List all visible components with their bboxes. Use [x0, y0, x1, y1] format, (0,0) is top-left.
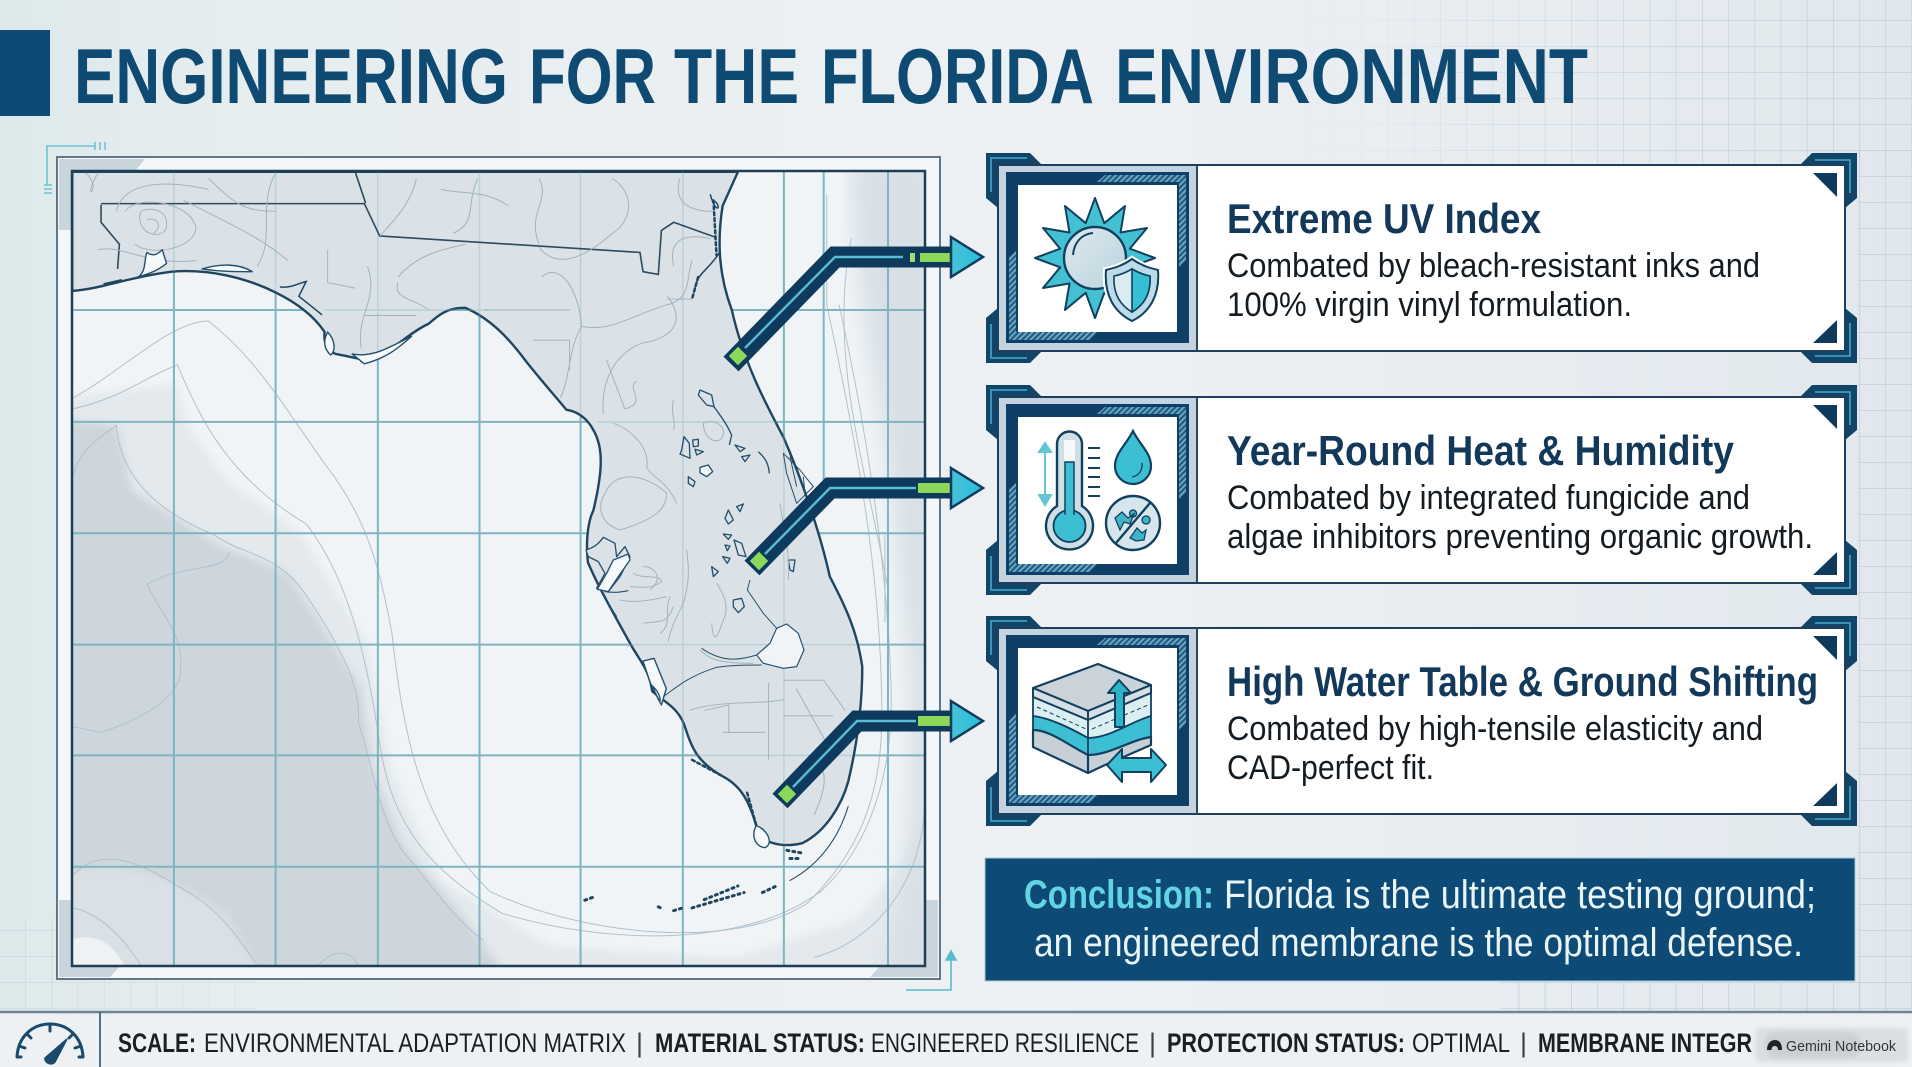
- footer status text: |: [1520, 1028, 1527, 1058]
- footer status text: |: [1149, 1028, 1156, 1058]
- title: FOR: [529, 32, 656, 120]
- card body text: [1227, 479, 1813, 556]
- panel: High Water Table and Ground Shifting: [986, 616, 1857, 826]
- panel: Year-Round Heat and Humidity: [986, 385, 1857, 595]
- title: [74, 32, 1588, 120]
- title: FLORIDA: [821, 32, 1094, 120]
- peninsula lakes, east: [643, 390, 813, 668]
- icon: ground layers with arrows: [1033, 664, 1166, 782]
- footer status text: ENGINEERED RESILIENCE: [871, 1028, 1139, 1058]
- inland contours and rivers: [86, 173, 845, 815]
- panel: Florida map: [44, 142, 956, 990]
- peninsula lakes, west: [586, 423, 762, 697]
- card body text: 100% virgin vinyl formulation.: [1227, 286, 1632, 324]
- title: THE: [674, 32, 799, 120]
- card body text: Combated by high-tensile elasticity and: [1227, 710, 1763, 748]
- footer status text: |: [636, 1028, 643, 1058]
- card frame: [986, 153, 1857, 363]
- icon: thermometer, droplet and no-growth symbol: [1039, 431, 1160, 550]
- card body text: [1227, 710, 1763, 787]
- card body text: Combated by bleach-resistant inks and: [1227, 247, 1760, 285]
- icon: gauge: [17, 1024, 83, 1064]
- watermark: Gemini Notebook: Gemini Notebook: [1786, 1038, 1896, 1055]
- map outer frame: [57, 157, 940, 979]
- watermark: Gemini Notebook: [1755, 1028, 1908, 1062]
- card body text: algae inhibitors preventing organic growth.: [1227, 518, 1813, 556]
- footer status text: SCALE:: [118, 1028, 196, 1058]
- Florida landmass: [72, 172, 862, 845]
- arrow: UV index callout: [729, 237, 983, 365]
- map sheet in reference coordinates: [61, 162, 937, 979]
- footer status text: ENVIRONMENTAL ADAPTATION MATRIX: [204, 1028, 626, 1058]
- footer status text: [118, 1028, 1752, 1058]
- title: ENGINEERING: [74, 32, 508, 120]
- water grid: [73, 172, 925, 965]
- card body text: [1227, 247, 1760, 324]
- continental shelf and gulf depths: [61, 162, 937, 979]
- arrow: heat and humidity callout: [750, 468, 983, 570]
- footer status text: OPTIMAL: [1412, 1028, 1510, 1058]
- coastal detail and keys: [104, 195, 848, 911]
- footer status text: MATERIAL STATUS:: [655, 1028, 865, 1058]
- card body text: CAD-perfect fit.: [1227, 749, 1434, 787]
- card heading: Year-Round Heat & Humidity: [1227, 427, 1735, 474]
- depth contour lines: [73, 195, 925, 965]
- callout: conclusion: Conclusion:: [1024, 873, 1214, 917]
- callout: conclusion: an engineered membrane is the optimal defense.: [1034, 921, 1803, 965]
- cyan dimension tick: top left: [44, 142, 105, 193]
- card frame: [986, 385, 1857, 595]
- cyan dimension arrow: bottom right: [906, 951, 956, 990]
- card heading: Extreme UV Index: [1227, 195, 1542, 242]
- card frame: [986, 616, 1857, 826]
- footer status text: MEMBRANE INTEGR: [1538, 1028, 1752, 1058]
- card body text: Combated by integrated fungicide and: [1227, 479, 1750, 517]
- footer status bar: [0, 1012, 1912, 1067]
- panel: Extreme UV Index: [986, 153, 1857, 363]
- white water bodies: north Gulf lagoons: [138, 250, 769, 848]
- map inner frame: [72, 171, 925, 966]
- footer status text: PROTECTION STATUS:: [1167, 1028, 1405, 1058]
- callout: conclusion: [985, 858, 1855, 981]
- title: ENVIRONMENT: [1115, 32, 1588, 120]
- faint grid over land: [173, 172, 858, 845]
- title block marker: [0, 30, 50, 116]
- state border and north coast: [101, 172, 717, 274]
- icon: sun with shield: [1035, 198, 1158, 321]
- callout: conclusion: Florida is the ultimate testing ground;: [1224, 873, 1816, 917]
- arrow: water table callout: [778, 701, 983, 803]
